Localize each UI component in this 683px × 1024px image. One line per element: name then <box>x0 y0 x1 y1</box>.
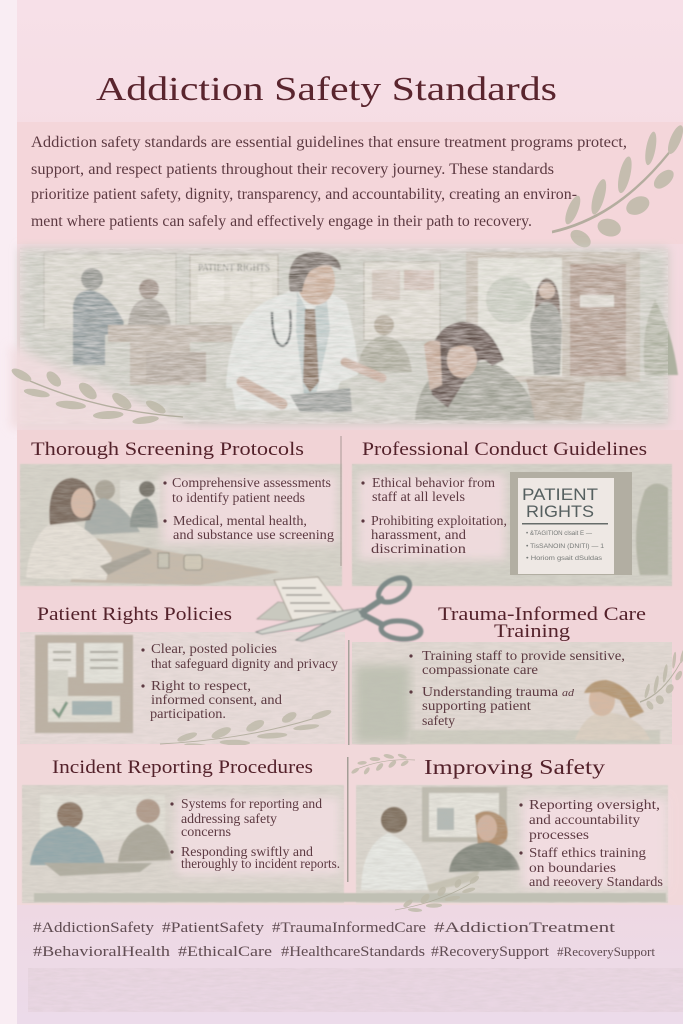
bullet list: to identify patient needs <box>172 491 305 506</box>
blades <box>256 608 366 634</box>
panel: professional conduct guidelines <box>345 430 683 590</box>
bullet list: compassionate care <box>422 663 538 678</box>
bullet list: Right to respect, <box>151 679 251 694</box>
bullet list: concerns <box>181 825 231 840</box>
bullet list: addressing safety <box>181 812 277 827</box>
doctor and woman consulting <box>361 787 520 892</box>
bullet list: and substance use screening <box>173 528 334 543</box>
panel: thorough screening protocols <box>17 430 345 590</box>
panel: patient rights policies <box>17 590 348 750</box>
screening texture <box>20 464 342 586</box>
bullet list: Prohibiting exploitation, <box>371 514 507 529</box>
heading: Thorough Screening Protocols <box>31 439 304 460</box>
foreground paper fade <box>10 345 195 428</box>
bullet list: supporting patient <box>422 699 531 714</box>
doctor <box>226 252 382 412</box>
text backing <box>176 797 340 875</box>
two men at table <box>30 795 172 876</box>
bullet list: staff at all levels <box>372 490 465 505</box>
bullet list: Comprehensive assessments <box>172 476 331 491</box>
back wall boards <box>44 254 176 329</box>
leaf sprig <box>160 709 335 750</box>
heading: Improving Safety <box>424 755 606 779</box>
bullet list <box>409 649 625 729</box>
bullet list: Reporting oversight, <box>529 798 660 813</box>
intro paragraph: prioritize patient safety, dignity, transparency, and accountability, creating an environ- <box>31 186 577 203</box>
heading <box>438 604 646 642</box>
bullet list: discrimination <box>371 542 466 557</box>
bottom leaf sprig <box>389 875 488 915</box>
patient rights poster <box>510 472 632 575</box>
illustration: scissors and document <box>256 573 422 641</box>
plant <box>644 300 678 375</box>
foreground leaf sprig <box>8 367 183 425</box>
bullet list: Staff ethics training <box>529 846 646 861</box>
bullet list: participation. <box>150 707 226 722</box>
bullet list: Training staff to provide sensitive, <box>422 649 625 664</box>
text backing <box>522 798 668 888</box>
bullet list: Clear, posted policies <box>151 642 277 657</box>
hashtag row two <box>33 944 656 960</box>
distressed woman <box>415 322 540 420</box>
hashtag row one <box>33 920 616 936</box>
hashtag row two: #HealthcareStandards <box>281 944 425 960</box>
panel: introduction <box>17 121 683 251</box>
bullet list <box>519 798 663 890</box>
bullet list: Understanding trauma ad <box>422 685 575 700</box>
hashtag row two: #RecoverySupport <box>557 945 656 959</box>
bullet list: and reeovery Standards <box>529 875 663 890</box>
sprig <box>640 647 683 711</box>
handles <box>374 573 414 607</box>
heading: Patient Rights Policies <box>37 604 232 625</box>
intro paragraph <box>31 134 627 230</box>
wall board right of doctor <box>364 262 440 340</box>
intro paragraph: Addiction safety standards are essential guidelines that ensure treatment programs protect, <box>31 134 627 151</box>
hashtags <box>33 920 656 960</box>
hashtag row two: #RecoverySupport <box>431 944 550 960</box>
conduct texture <box>352 464 672 586</box>
receptionist <box>128 279 171 325</box>
bullet list: theroughly to incident reports. <box>181 857 340 872</box>
woman portrait <box>575 680 650 740</box>
underlying sheet <box>257 602 300 621</box>
hashtag row one: #AddictionTreatment <box>434 920 616 936</box>
heading: Trauma-Informed Care <box>438 604 646 625</box>
heading: Training <box>494 621 571 642</box>
doorway <box>466 252 640 382</box>
hashtag row two: #EthicalCare <box>178 944 272 960</box>
training texture <box>352 642 672 744</box>
patient rights board <box>190 255 278 323</box>
bullet list <box>361 476 507 557</box>
bottom faded textured panel <box>28 968 683 1012</box>
document <box>274 577 344 620</box>
bullet list <box>141 642 338 722</box>
bullet list: Ethical behavior from <box>372 476 495 491</box>
incident texture <box>22 785 344 903</box>
hashtag row two: #BehavioralHealth <box>33 944 171 960</box>
screening illustration <box>26 478 280 585</box>
bullet list <box>163 476 334 543</box>
divider row three <box>347 757 348 882</box>
heading: Incident Reporting Procedures <box>52 757 313 778</box>
improving texture <box>356 785 668 903</box>
patient rights board: PATIENT RIGHTS <box>198 262 270 274</box>
bullet list <box>170 797 340 872</box>
bullet list: harassment, and <box>371 528 466 543</box>
bullet list: informed consent, and <box>151 693 282 708</box>
heading: Professional Conduct Guidelines <box>362 439 647 460</box>
panel: improving safety <box>348 745 683 905</box>
panel: trauma-informed care training <box>348 590 683 745</box>
bullet list: Systems for reporting and <box>181 797 322 812</box>
bullet list: on boundaries <box>529 861 616 876</box>
bullet list: Responding swiftly and <box>181 845 313 860</box>
title: Addiction Safety Standards <box>96 71 557 108</box>
text backing <box>162 474 338 544</box>
bullet list: safety <box>422 714 455 729</box>
hashtag row one: #AddictionSafety <box>33 920 155 936</box>
hero illustration: doctor and patient in clinic <box>8 248 678 428</box>
text backing <box>358 474 506 560</box>
divider row two <box>348 640 350 745</box>
bullet list: that safeguard dignity and privacy <box>151 657 338 672</box>
reception desk <box>108 325 232 385</box>
intro decorative sprig <box>552 121 683 251</box>
divider row one <box>340 436 342 566</box>
bulletin board illustration <box>35 635 133 733</box>
panel: incident reporting procedures <box>17 745 348 905</box>
hashtag row one: #TraumaInformedCare <box>272 920 426 936</box>
left margin strip <box>0 0 17 1024</box>
policies texture <box>20 632 345 744</box>
plant with figure <box>636 483 668 575</box>
bullet list: Medical, mental health, <box>173 514 307 529</box>
bullet list: processes <box>529 828 589 843</box>
intro paragraph: ment where patients can safely and effectively engage in their path to recovery. <box>31 213 532 230</box>
leaf accent <box>350 745 416 785</box>
man at desk <box>73 268 124 365</box>
patient rights poster: • Horiom gsait dSuldas <box>526 555 603 562</box>
patient rights poster: • TisSANOIN (DNITI) — 1 <box>526 543 604 550</box>
bullet list: and accountability <box>529 813 640 828</box>
chair <box>526 378 585 420</box>
intro paragraph: support, and respect patients throughout their recovery journey. These standards <box>31 161 554 178</box>
bottom grey band <box>34 893 666 902</box>
hero texture <box>20 248 668 424</box>
patient rights poster: • &TAGITION clsait E — <box>526 530 592 537</box>
patient rights poster: PATIENT <box>522 485 598 504</box>
woman in doorway <box>530 278 562 375</box>
patient rights poster: RIGHTS <box>526 502 594 521</box>
hashtag row one: #PatientSafety <box>162 920 265 936</box>
seated patient background <box>357 315 412 372</box>
